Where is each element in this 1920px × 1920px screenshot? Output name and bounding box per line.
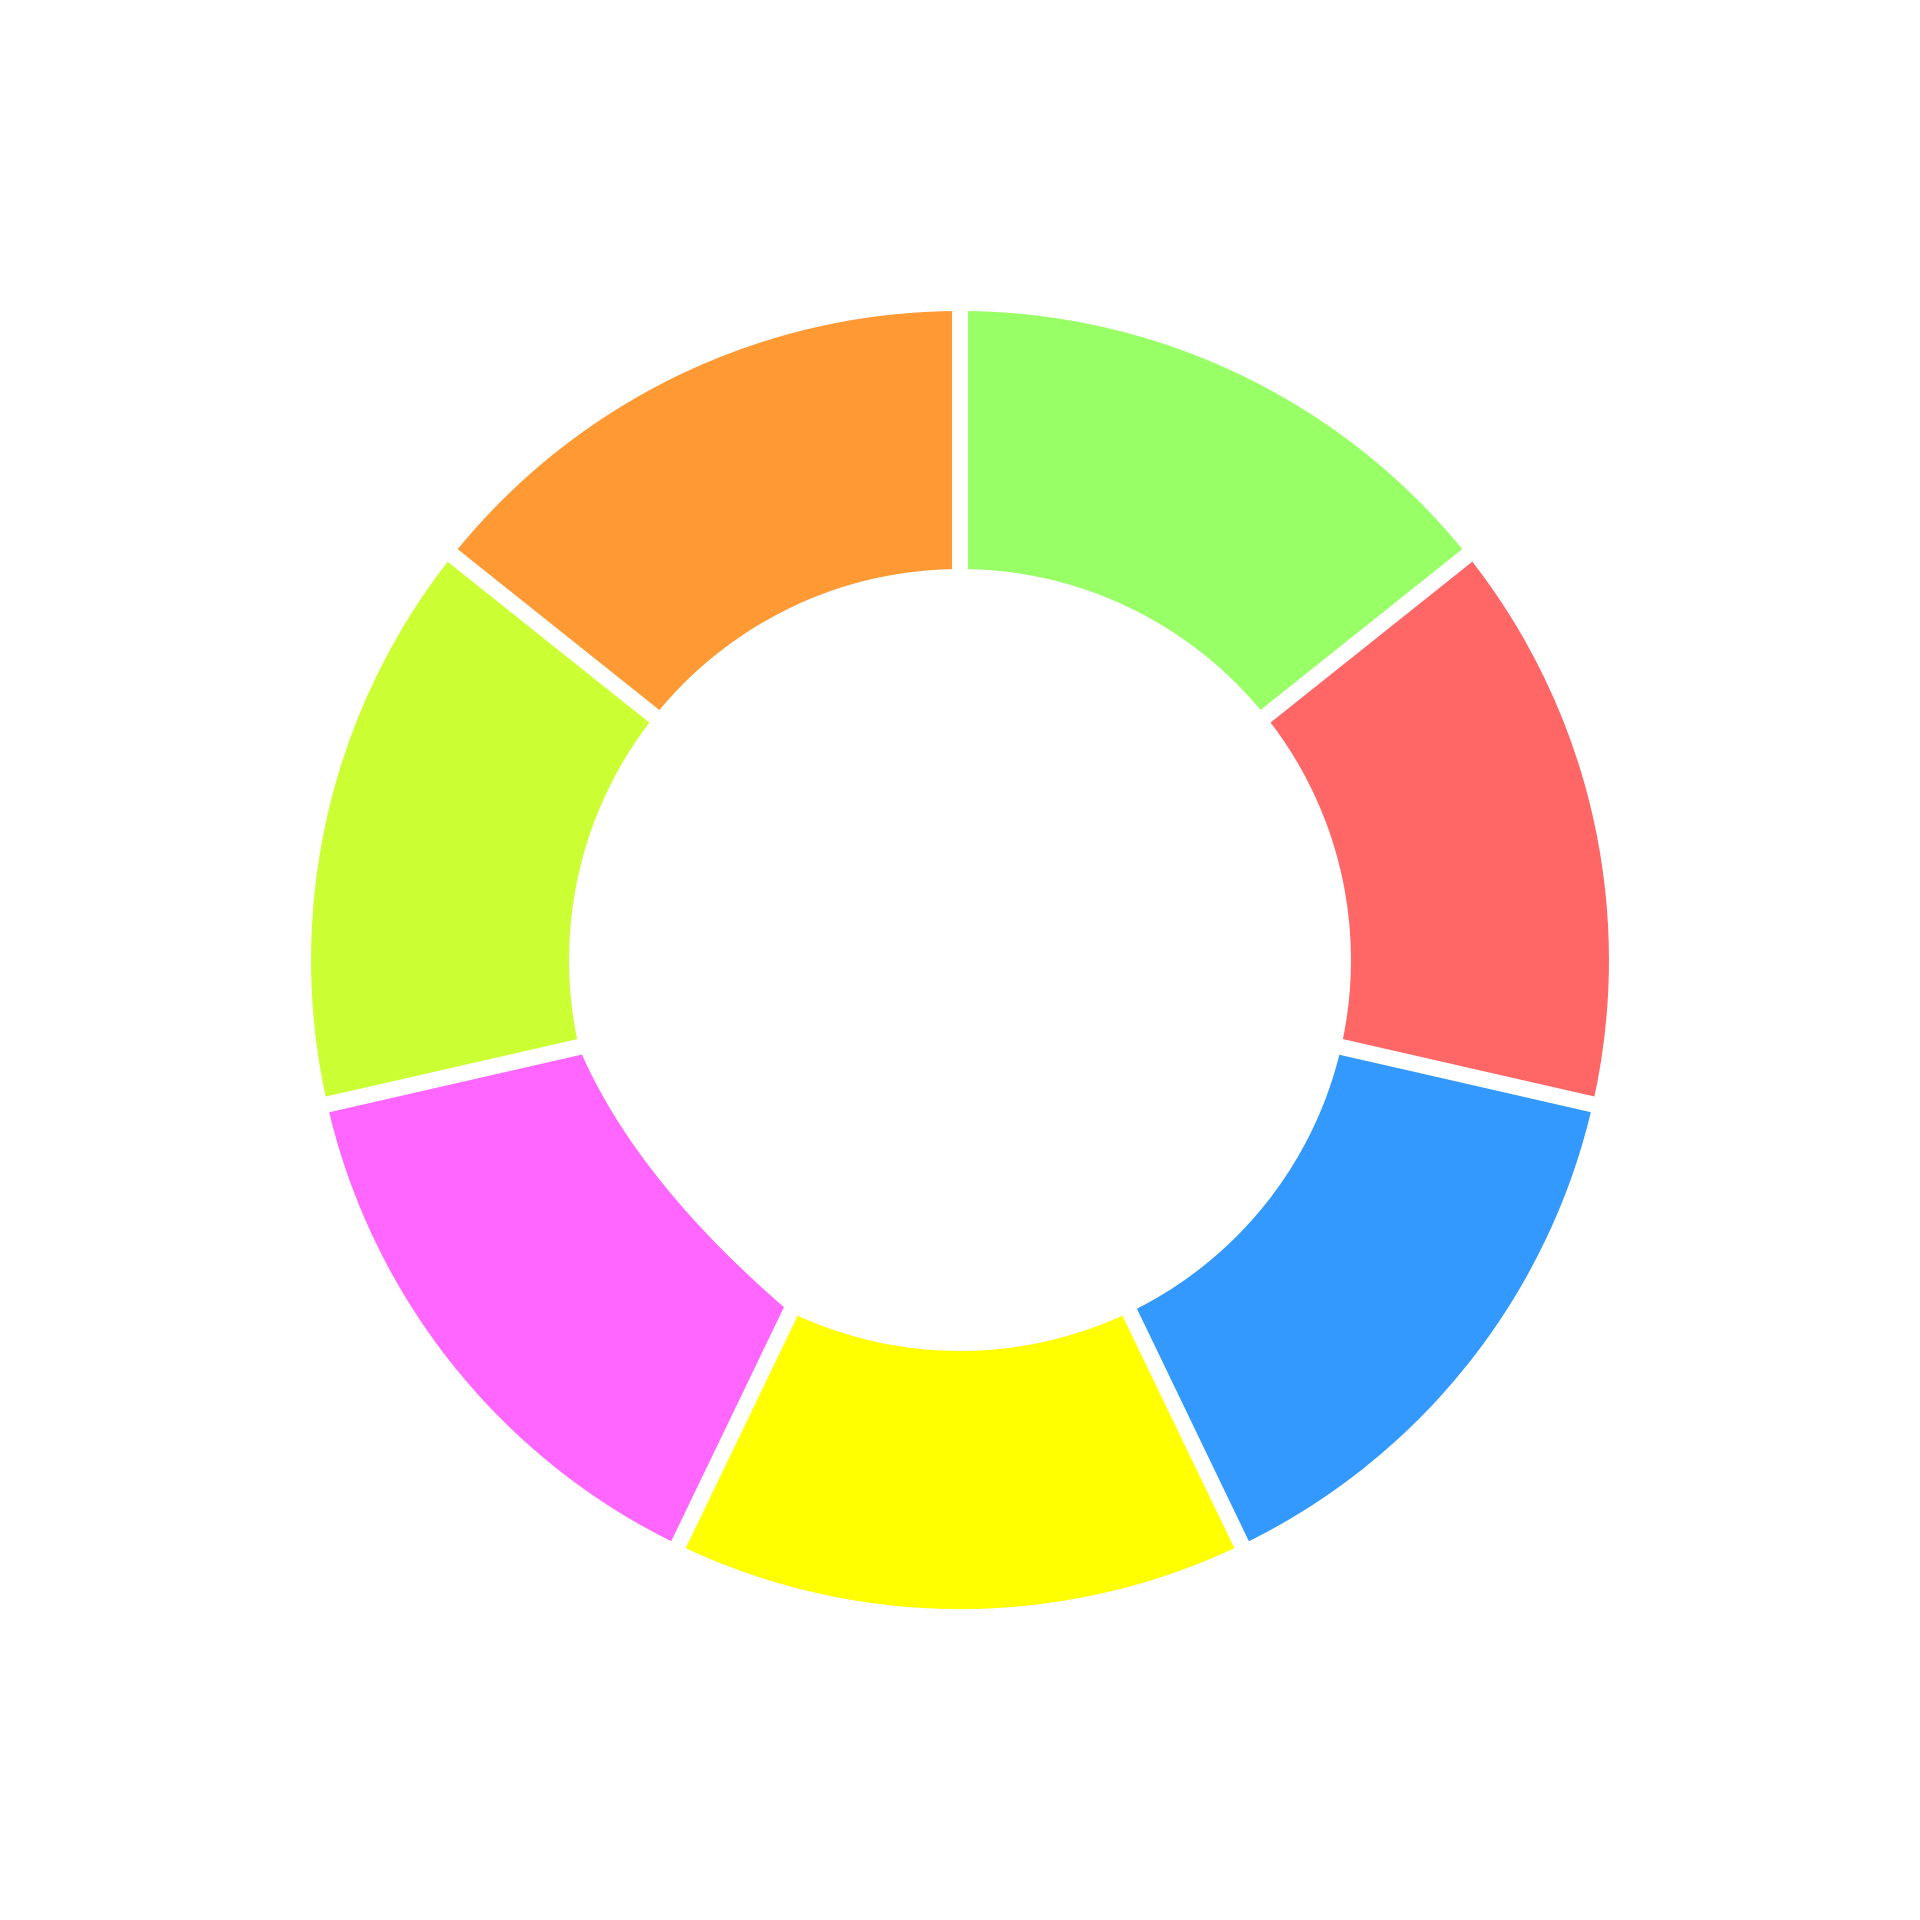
segment: magenta [320, 1045, 794, 1552]
segment: yellow [675, 1305, 1245, 1617]
segment: green [960, 303, 1474, 721]
segment: orange [446, 303, 960, 721]
segment: red [1259, 550, 1617, 1106]
segment: lime [303, 550, 661, 1106]
segment: blue [1126, 1045, 1600, 1552]
